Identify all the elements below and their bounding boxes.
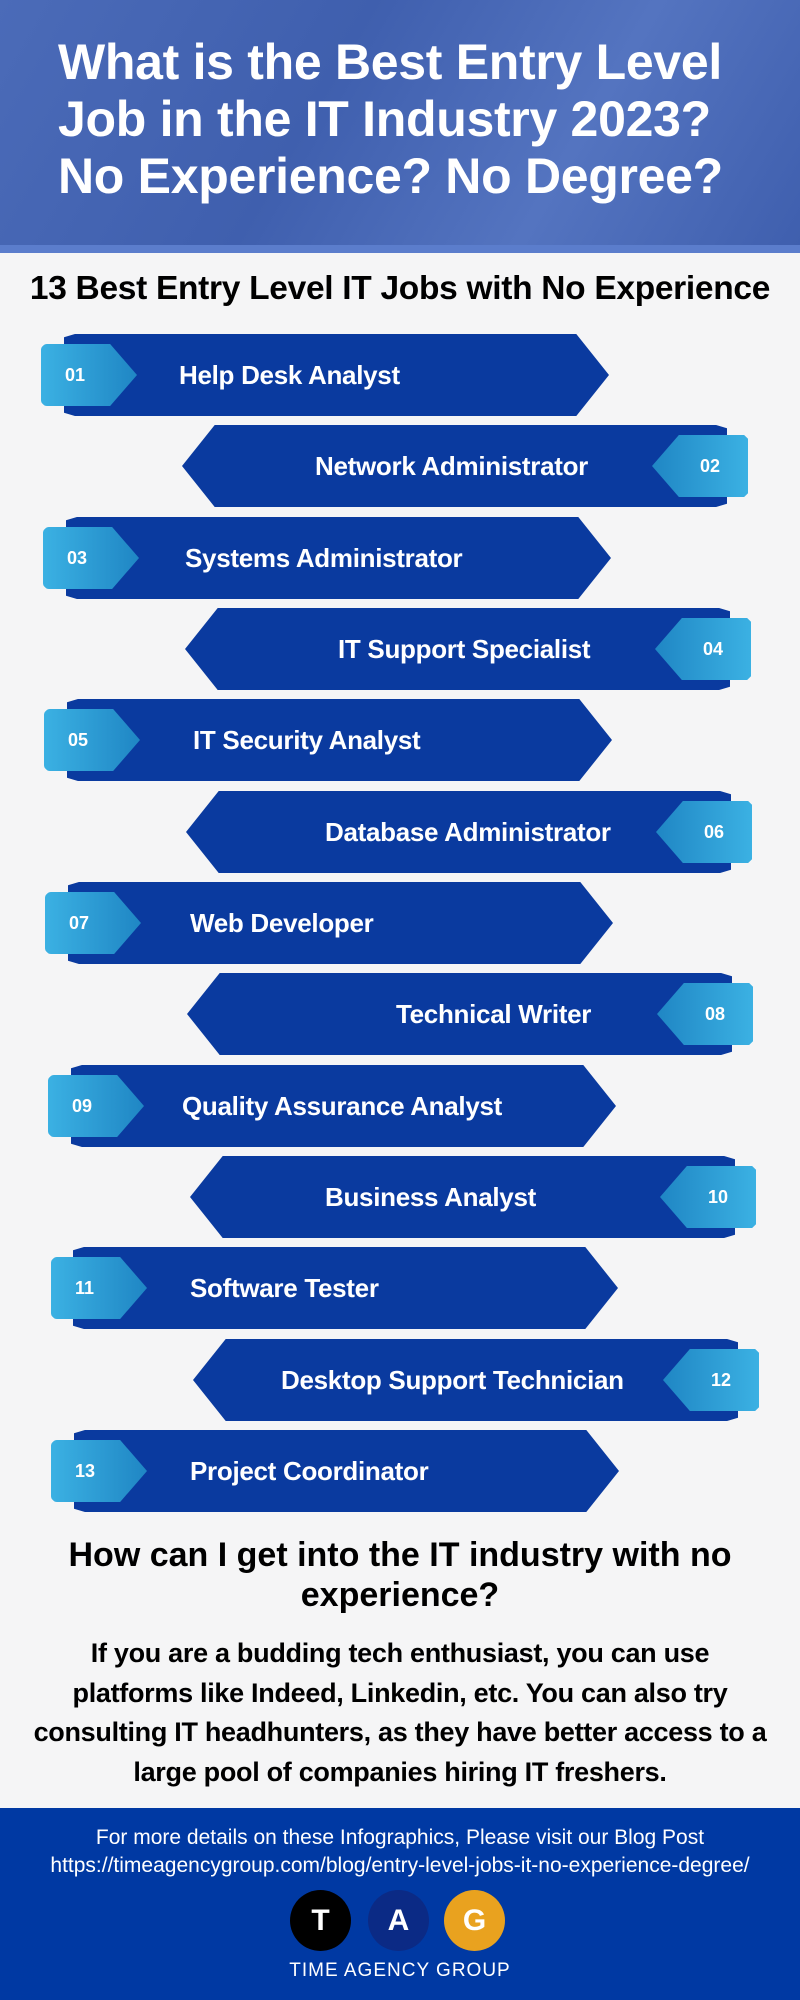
logo: TIME AGENCY GROUP (289, 1960, 511, 1981)
row 10: Business Analyst (325, 1182, 536, 1212)
row 12: Desktop Support Technician (281, 1365, 624, 1395)
row 08 (187, 973, 753, 1055)
row 02: 02 (700, 456, 720, 476)
row 08: Technical Writer (396, 999, 591, 1029)
row 02 (182, 425, 748, 507)
row 06: 06 (704, 822, 724, 842)
logo (289, 1890, 511, 1981)
row 01: Help Desk Analyst (179, 360, 400, 390)
row 07: 07 (69, 913, 89, 933)
title: No Experience? No Degree? (58, 148, 723, 204)
row 13: 13 (75, 1461, 95, 1481)
row 03: 03 (67, 548, 87, 568)
logo: T (311, 1904, 330, 1937)
answer paragraph: consulting IT headhunters, as they have better access to a (34, 1717, 766, 1747)
row 01 (41, 334, 609, 416)
row 02: Network Administrator (315, 451, 588, 481)
answer paragraph: large pool of companies hiring IT freshers. (133, 1756, 667, 1786)
logo: G (463, 1904, 486, 1937)
title (58, 34, 723, 204)
row 13: Project Coordinator (190, 1456, 428, 1486)
subtitle: 13 Best Entry Level IT Jobs with No Experience (30, 270, 770, 307)
row 09: Quality Assurance Analyst (182, 1091, 502, 1121)
row 07 (45, 882, 613, 964)
row 05 (44, 699, 612, 781)
footer url: https://timeagencygroup.com/blog/entry-level-jobs-it-no-experience-degree/ (50, 1854, 750, 1877)
row 08: 08 (705, 1004, 725, 1024)
row 06: Database Administrator (325, 817, 611, 847)
row 09 (48, 1065, 616, 1147)
row 12 (193, 1339, 759, 1421)
title: What is the Best Entry Level (58, 34, 722, 90)
title: Job in the IT Industry 2023? (58, 91, 711, 147)
answer paragraph (34, 1638, 767, 1786)
row 04 (185, 608, 751, 690)
row 01: 01 (65, 365, 85, 385)
question heading: How can I get into the IT industry with no experience? (68, 1536, 731, 1614)
row 13 (51, 1430, 619, 1512)
row 07: Web Developer (190, 908, 373, 938)
header banner (0, 0, 800, 245)
row 09: 09 (72, 1096, 92, 1116)
footer text: For more details on these Infographics, Please visit our Blog Post (96, 1826, 704, 1849)
row 11 (51, 1247, 618, 1329)
row 03 (43, 517, 611, 599)
row 05: 05 (68, 730, 88, 750)
row 10: 10 (708, 1187, 728, 1207)
row 06 (186, 791, 752, 873)
row 04: IT Support Specialist (338, 634, 590, 664)
row 10 (190, 1156, 756, 1238)
row 03: Systems Administrator (185, 543, 462, 573)
row 04: 04 (703, 639, 723, 659)
row 11: Software Tester (190, 1273, 379, 1303)
row 11: 11 (75, 1278, 94, 1298)
logo: A (388, 1904, 409, 1937)
answer paragraph: If you are a budding tech enthusiast, you can use (91, 1638, 709, 1668)
answer paragraph: platforms like Indeed, Linkedin, etc. You can also try (72, 1678, 727, 1708)
row 12: 12 (711, 1370, 731, 1390)
footer (0, 1808, 800, 2000)
row 05: IT Security Analyst (193, 725, 420, 755)
